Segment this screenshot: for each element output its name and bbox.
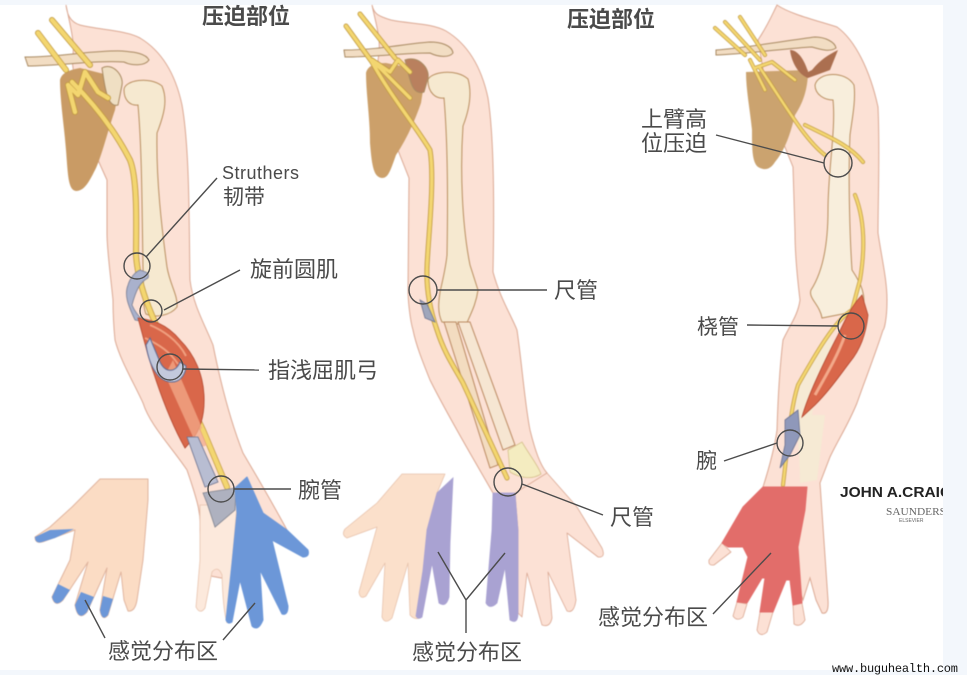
panel: radial nerve arm (709, 5, 887, 635)
panel: ulnar nerve arm (343, 5, 603, 626)
label: Struthers ligament (222, 163, 300, 209)
label: sensory area 2: 感觉分布区 (412, 640, 522, 665)
label: Struthers ligament: 韧带 (223, 186, 265, 209)
arm 2 dorsal hand (343, 474, 445, 621)
arm 2 skin (372, 5, 547, 500)
credit: author and publisher (840, 484, 952, 524)
arm 3 red hand (722, 487, 807, 612)
label: high upper arm compression (641, 107, 707, 156)
label: pronator teres: 旋前圆肌 (250, 257, 338, 282)
label: carpal tunnel: 腕管 (298, 478, 342, 503)
credit: author and publisher: ELSEVIER (899, 518, 924, 524)
arm 2 purple palm (486, 493, 518, 621)
credit: author and publisher: SAUNDERS (886, 506, 946, 518)
label: high upper arm compression: 上臂高 (641, 107, 707, 132)
label: high upper arm compression: 位压迫 (641, 131, 707, 156)
arm 2 clavicle (344, 42, 453, 57)
arm 1 scapula (60, 68, 120, 191)
arm 3 humerus (811, 74, 864, 318)
arm 3 shoulder joint (790, 50, 838, 78)
panel: median nerve arm (25, 5, 308, 628)
arm 2 palm and fingers (515, 473, 603, 626)
arm 1 forearm tendons (187, 437, 218, 487)
arm 1 humerus (124, 80, 177, 316)
label: ulnar tunnel: 尺管 (610, 505, 654, 530)
arm 2 humerus (428, 72, 478, 325)
arm 3 wrist ligament (780, 410, 800, 468)
arm 1 palm skin and pale fingers (196, 505, 237, 623)
arm 3 nerves (715, 17, 863, 485)
arm 3 clavicle (716, 37, 836, 55)
label: sensory area 3: 感觉分布区 (598, 605, 708, 630)
leader lines and circles (85, 135, 864, 640)
arm 3 finger tips (709, 543, 805, 635)
arm 3 forearm muscles (802, 295, 868, 417)
arm 1 struthers ligament (126, 270, 148, 322)
arm 1 dorsal hand (35, 479, 148, 618)
heading: compression site 1: 压迫部位 (202, 4, 290, 29)
arm 2 purple dorsal area (416, 478, 453, 618)
label: cubital tunnel: 尺管 (554, 278, 598, 303)
arm 1 skin (66, 5, 287, 580)
arm 1 superficialis arch (146, 338, 186, 382)
arm 1 transverse carpal ligament (203, 488, 236, 527)
arm 2 shoulder joint (405, 59, 428, 93)
arm 1 forearm muscles (138, 318, 204, 448)
label: sensory area 1: 感觉分布区 (108, 639, 218, 664)
arm 3 forearm bone (795, 335, 836, 483)
arm 3 scapula (746, 70, 808, 169)
arm 2 scapula (366, 63, 426, 178)
arm 2 nerves (346, 14, 507, 478)
arm 1 nerves (38, 20, 227, 487)
arm 1 shoulder joint (102, 66, 122, 105)
arm 2 cubital tunnel ligament (420, 300, 435, 322)
arm 1 blue palm (226, 477, 308, 628)
arm 1 clavicle (25, 51, 149, 66)
arm 3 skin (758, 5, 887, 613)
label: radial tunnel: 桡管 (697, 316, 739, 339)
credit: author and publisher: JOHN A.CRAIG (840, 484, 952, 501)
label: Struthers ligament: Struthers (222, 163, 300, 183)
label: wrist: 腕 (696, 450, 717, 473)
arm 1 blue finger tips (35, 529, 113, 618)
arm 2 forearm bones (444, 322, 541, 478)
heading: compression site 2: 压迫部位 (567, 7, 655, 32)
label: superficialis arch: 指浅屈肌弓 (268, 358, 378, 383)
